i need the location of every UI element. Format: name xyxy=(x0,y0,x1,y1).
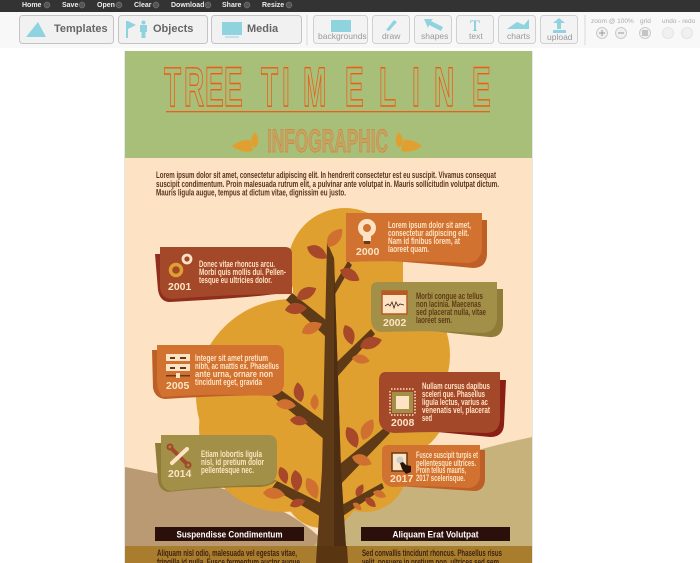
timeline card: 2017 xyxy=(382,445,485,491)
top menu bar: Home xyxy=(22,2,42,9)
section heading: Aliquam Erat Volutpat: Aliquam Erat Volutpat xyxy=(392,530,479,540)
trunk and branches xyxy=(272,242,390,563)
timeline card: 2001: tesque eu ultricies dolor. xyxy=(199,275,272,285)
timeline card: 2000: 2000 xyxy=(356,246,380,258)
timeline card: 2002: non lacinia. Maecenas xyxy=(416,299,481,309)
section heading: Suspendisse Condimentum xyxy=(155,527,304,541)
top menu bar: Resize xyxy=(262,2,284,9)
timeline card: 2000: laoreet quam. xyxy=(388,244,429,254)
button: draw xyxy=(372,16,410,44)
timeline card: 2008: Nullam cursus dapibus xyxy=(422,381,490,391)
timeline card: 2002: 2002 xyxy=(383,317,407,329)
top menu bar: Open xyxy=(97,2,115,9)
view controls xyxy=(591,18,696,38)
top menu bar: Share xyxy=(222,2,242,9)
tree xyxy=(263,225,390,563)
timeline card: 2005: Integer sit amet pretium xyxy=(195,353,268,363)
trunk base overlay xyxy=(316,546,348,563)
timeline card: 2014 xyxy=(155,435,277,492)
intro text: Lorem ipsum dolor sit amet, consectetur adipiscing elit. In hendrerit consectetur est eu suscipit. Vivamus consequat xyxy=(156,170,496,180)
timeline card: 2008: ligula lectus, varius ac xyxy=(422,397,488,407)
timeline card: 2014: 2014 xyxy=(168,468,192,480)
button: Media: Media xyxy=(247,23,279,35)
button: shapes: shapes xyxy=(421,31,448,41)
editor toolbar xyxy=(0,12,700,48)
intro text xyxy=(156,170,499,198)
view controls: undo - redo xyxy=(662,18,696,25)
timeline card: 2005: 2005 xyxy=(166,380,190,392)
top menu bar: Download xyxy=(171,2,204,9)
section text: left column xyxy=(157,550,300,563)
header panel xyxy=(125,51,532,159)
section heading: Suspendisse Condimentum: Suspendisse Condimentum xyxy=(176,530,282,540)
timeline card: 2000: Nam id finibus lorem, at xyxy=(388,236,460,246)
view controls: grid xyxy=(640,18,651,25)
timeline card: 2002 xyxy=(371,282,503,337)
section text: right column xyxy=(362,548,502,563)
button: Templates xyxy=(20,16,114,44)
timeline card: 2008: venenatis vel, placerat xyxy=(422,405,490,415)
button: draw: draw xyxy=(382,31,401,41)
tree crown xyxy=(196,208,450,528)
button: backgrounds xyxy=(314,16,368,44)
timeline card: 2017: Fusce suscipit turpis et xyxy=(416,450,478,460)
timeline card: 2001: Donec vitae rhoncus arcu. xyxy=(199,259,275,269)
leaves xyxy=(263,225,388,512)
timeline card: 2005: nibh, ac mattis ex. Phasellus xyxy=(195,361,279,371)
timeline card: 2008: sceleri que. Phasellus xyxy=(422,389,485,399)
button: upload: upload xyxy=(547,32,573,42)
intro text: Mauris ligula augue, tempus at dictum vitae, dignissim eu justo. xyxy=(156,188,346,198)
subtitle: Infographic: INFOGRAPHIC xyxy=(267,123,388,159)
button: text xyxy=(456,16,494,44)
page background xyxy=(125,51,532,563)
icon: microchip xyxy=(390,389,415,415)
timeline card: 2014: Etiam lobortis ligula xyxy=(201,449,263,459)
button: upload xyxy=(540,16,578,44)
timeline card: 2001: 2001 xyxy=(168,281,192,293)
timeline card: 2017: pellentesque ultrices. xyxy=(416,458,476,468)
icon: right leaves xyxy=(396,132,422,152)
icon: touch tablet xyxy=(392,453,411,474)
icon: crossed wrenches xyxy=(168,444,190,468)
timeline card: 2014: pellentesque nec. xyxy=(201,465,254,475)
title underline xyxy=(166,111,490,112)
icon: server racks xyxy=(166,354,190,378)
view controls: zoom @ 100% xyxy=(591,18,634,25)
bottom band xyxy=(125,546,532,563)
title: Tree Timeline: TREE TIMELINE xyxy=(164,57,491,119)
section heading: Aliquam Erat Volutpat xyxy=(361,527,510,541)
timeline card: 2008 xyxy=(379,372,506,437)
timeline card: 2017: Proin tellus mauris, xyxy=(416,465,466,475)
button: text: text xyxy=(469,31,483,41)
section text: right column: Sed convallis tincidunt rhoncus. Phasellus risus xyxy=(362,548,502,558)
top menu bar: Clear xyxy=(134,2,152,9)
intro text: suscipit condimentum. Proin malesuada rutrum elit, a pulvinar ante volutpat in. Mauris sollicitudin volutpat dictum. xyxy=(156,179,499,189)
timeline card: 2000: Lorem ipsum dolor sit amet, xyxy=(388,220,471,230)
button: Objects xyxy=(118,16,208,44)
timeline card: 2008: sed xyxy=(422,413,432,423)
timeline card: 2001 xyxy=(155,247,292,302)
top menu bar: Save xyxy=(62,2,78,9)
timeline card: 2000: consectetur adipiscing elit. xyxy=(388,228,469,238)
button: Objects: Objects xyxy=(153,23,193,35)
timeline card: 2005: tincidunt eget, gravida xyxy=(195,377,263,387)
timeline card: 2005 xyxy=(152,345,284,399)
timeline card: 2008: 2008 xyxy=(391,417,415,429)
top menu bar xyxy=(0,0,700,12)
button: Media xyxy=(212,16,302,44)
section text: left column: Aliquam nisl odio, malesuada vel egestas vitae, xyxy=(157,548,297,558)
button: text: T xyxy=(470,18,480,35)
icon: monitor xyxy=(382,291,407,314)
icon: left leaves xyxy=(232,132,258,152)
timeline card: 2002: Morbi congue ac tellus xyxy=(416,291,483,301)
button: Templates: Templates xyxy=(54,23,108,35)
timeline card: 2017: 2017 scelerisque. xyxy=(416,473,465,483)
button: charts xyxy=(498,16,536,44)
background hills xyxy=(125,437,532,546)
timeline card: 2017: 2017 xyxy=(390,473,414,485)
timeline card: 2000 xyxy=(346,213,487,268)
timeline card: 2001: Morbi quis mollis dui. Pellen- xyxy=(199,267,286,277)
timeline card: 2002: sed placerat nulla, vitae xyxy=(416,307,486,317)
timeline card: 2014: nisl, id pretium dolor xyxy=(201,457,264,467)
button: backgrounds: backgrounds xyxy=(318,31,367,41)
timeline card: 2005: ante urna, ornare non xyxy=(195,369,273,379)
timeline card: 2002: laoreet sem. xyxy=(416,315,452,325)
button: charts: charts xyxy=(507,31,530,41)
trunk shading xyxy=(334,258,347,563)
icon: gears xyxy=(170,255,191,276)
icon: light bulb xyxy=(358,219,376,244)
button: shapes xyxy=(414,16,452,44)
